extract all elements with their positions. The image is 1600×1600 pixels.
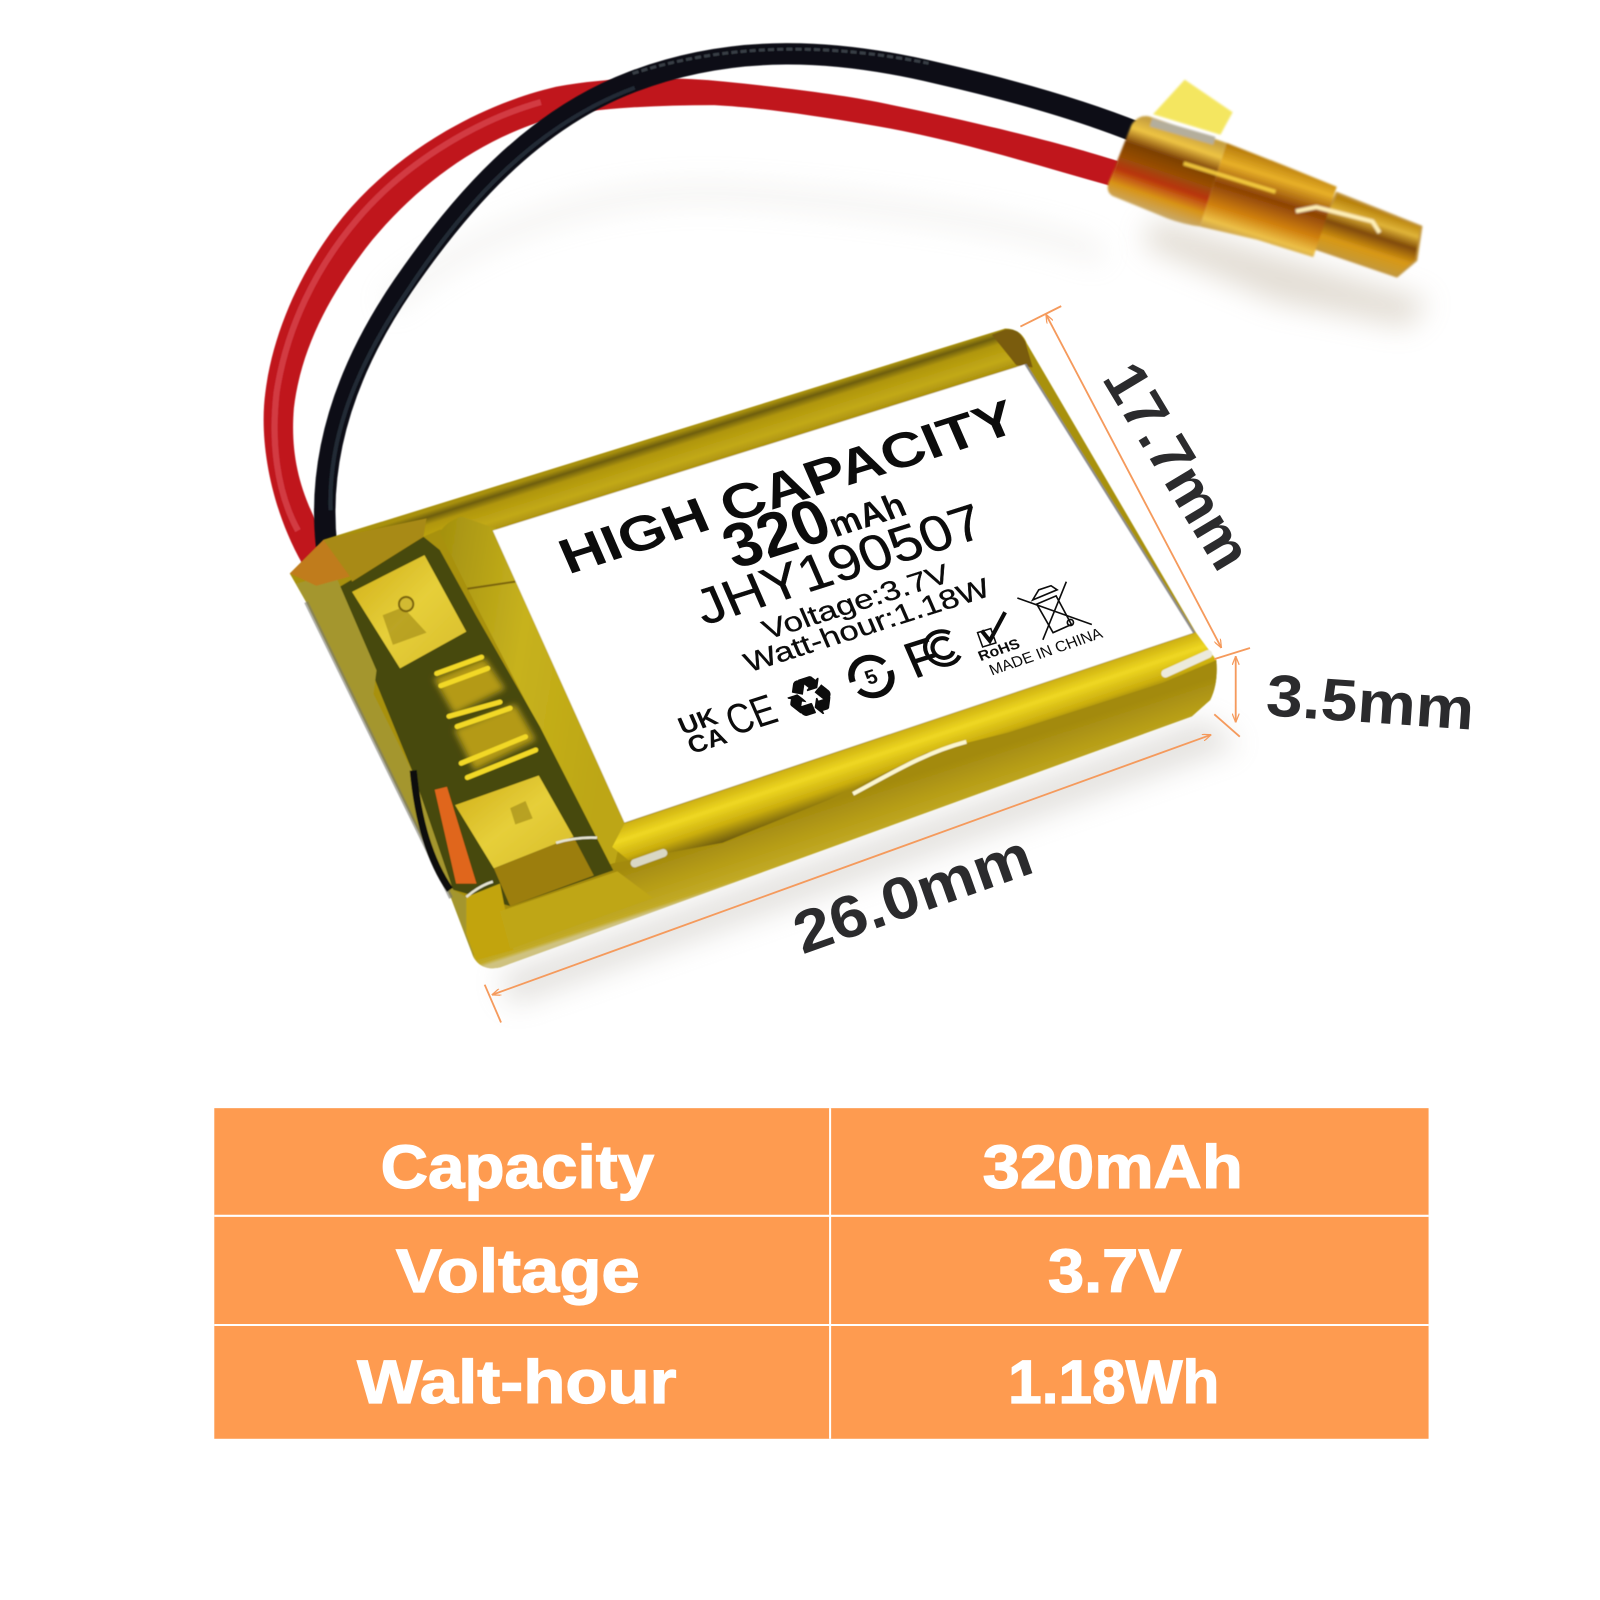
top band corner (992, 330, 1033, 367)
made in china: MADE IN CHINA (987, 625, 1106, 679)
row: voltage: 3.7V (1048, 1237, 1182, 1305)
sleeve rear (1108, 116, 1227, 227)
sleeve tip (1310, 193, 1421, 277)
model number: JHY190507 (686, 493, 992, 636)
row: capacity (381, 1133, 1243, 1201)
dimension label: 17.7mm: 17.7mm (1090, 351, 1265, 581)
icon: RoHS mark (976, 612, 1023, 665)
bottom-left fold (466, 884, 513, 960)
row: capacity: 320mAh (983, 1133, 1243, 1201)
upper tab weld (383, 597, 427, 645)
dimension label: 3.5mm: 3.5mm (1264, 661, 1477, 743)
width line (485, 735, 1211, 1022)
table background (214, 1108, 1429, 1439)
dimension lines (485, 306, 1250, 1022)
row: watt-hour: Walt-hour (357, 1348, 677, 1416)
panel top seam (467, 582, 515, 589)
outer grey edge (306, 602, 451, 898)
wire tape cap (290, 540, 350, 586)
thickness line (1214, 648, 1250, 737)
bottom seal strip (500, 871, 653, 949)
row: voltage: Voltage (396, 1237, 640, 1305)
label text (550, 389, 1106, 760)
soft shadows (388, 193, 1429, 1005)
sleeve mid (1200, 143, 1337, 257)
left pouch panel (440, 516, 624, 870)
black wire (325, 49, 1138, 546)
red wire (264, 78, 1118, 563)
row: capacity: Capacity (381, 1133, 654, 1201)
upper tape (323, 518, 427, 582)
voltage: Voltage:3.7V (757, 558, 955, 645)
row: watt-hour (357, 1348, 1219, 1416)
icon: UKCA mark: UK (674, 704, 722, 740)
orange terminal wire (435, 787, 477, 884)
icon: recycle: ♻ (774, 662, 847, 735)
row: voltage (396, 1237, 1182, 1305)
label edge line (1026, 364, 1194, 633)
connector (1108, 80, 1421, 277)
specification table (214, 1108, 1429, 1439)
top seal band (323, 329, 1033, 540)
lower nickel tab (455, 776, 573, 868)
tape glints (466, 838, 597, 897)
black terminal wire (413, 770, 450, 890)
icon: UKCA mark (674, 704, 731, 760)
upper nickel tab (352, 555, 466, 668)
icon: 5 year circle: 5 (861, 665, 881, 690)
watt-hour: Watt-hour:1.18W (739, 572, 994, 678)
row: watt-hour: 1.18Wh (1008, 1348, 1219, 1416)
body (290, 329, 1217, 968)
left edge side strip (296, 573, 473, 957)
corner highlights (1165, 654, 1208, 673)
table grid lines (214, 1108, 1429, 1439)
icon: 5 year circle (845, 653, 898, 700)
yellow tape flag (1153, 80, 1233, 135)
lower tab fold (494, 837, 594, 906)
sleeve highlights (1151, 122, 1214, 141)
lower tab weld (510, 801, 533, 824)
red wire highlight (275, 102, 541, 531)
depth line (1020, 306, 1221, 648)
icon: RoHS mark: RoHS (976, 636, 1023, 665)
dimension label: 26.0mm: 26.0mm (785, 821, 1041, 967)
upper rail (612, 633, 1216, 860)
bubbled tape highlights (437, 657, 536, 778)
terminal dark window (340, 537, 613, 906)
icon: FCC mark (896, 621, 967, 689)
HIGH CAPACITY: HIGH CAPACITY (550, 389, 1025, 585)
label sticker (493, 364, 1194, 822)
bubble soft gold (434, 658, 536, 770)
lower band (473, 660, 1217, 968)
icon: crossed-out bin (1017, 582, 1092, 640)
battery pouch (290, 329, 1217, 968)
icon: FCC mark: F (896, 627, 948, 689)
icon: CE mark: CE (718, 686, 784, 745)
320mAh: 320mAh (712, 463, 914, 582)
icon: UKCA mark: CA (683, 723, 731, 760)
crease highlight (853, 742, 966, 794)
